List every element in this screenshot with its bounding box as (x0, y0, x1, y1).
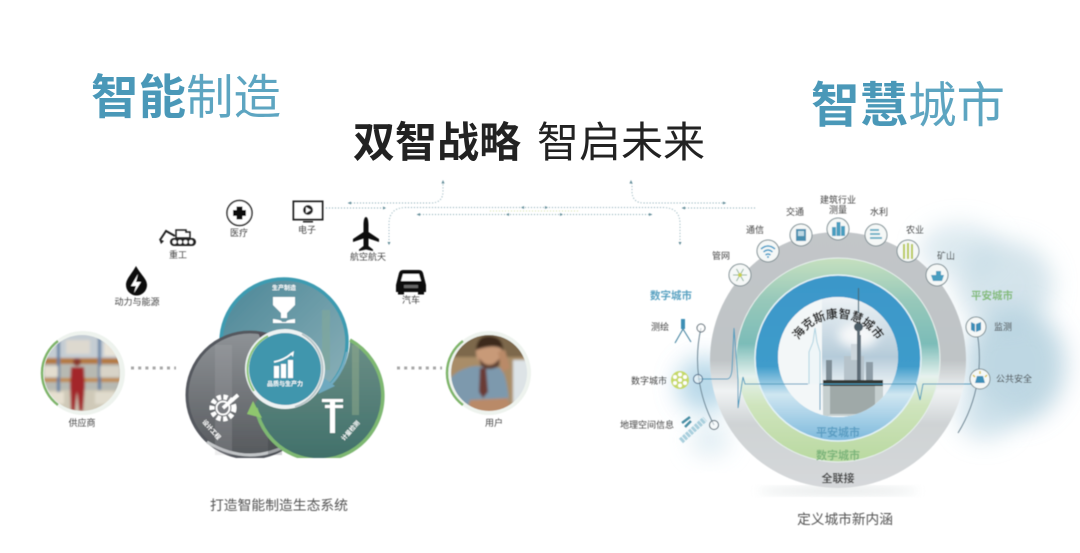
ring: digital city (736, 258, 940, 462)
user photo (447, 331, 531, 428)
ring: full connection (710, 232, 966, 488)
icon: water conservancy (865, 206, 888, 246)
item: public safety (970, 369, 1032, 389)
icon: power and energy: 动力与能源 (114, 296, 160, 307)
item: monitoring (966, 317, 1012, 337)
shadow (758, 488, 918, 494)
icon: power and energy (114, 266, 160, 307)
icon: electronics: 电子 (298, 224, 316, 235)
caption: smart city: 定义城市新内涵 (797, 511, 893, 527)
side arcs (698, 327, 979, 433)
center circle: quality and productivity (245, 329, 325, 409)
icon: agriculture: 农业 (906, 224, 924, 235)
city photo: 海克斯康智慧城市 (791, 307, 885, 340)
circle: metrology (255, 340, 383, 460)
item: surveying: 测绘 (651, 321, 669, 332)
icon: mining (926, 250, 955, 286)
item: public safety: 公共安全 (996, 373, 1032, 384)
icon: construction survey: 建筑行业 (820, 194, 856, 205)
ring: safe city (755, 275, 921, 441)
icon: pipe network (712, 250, 751, 286)
label: 用户 (485, 417, 503, 428)
diagram: smart city rings (710, 232, 966, 488)
ring: full connection: 全联接 (822, 471, 854, 485)
main heading: 双智战略 (353, 119, 521, 166)
icon: nozzle (273, 297, 295, 323)
icon: construction survey: 测量 (829, 205, 847, 215)
circle: design (184, 330, 283, 459)
circle: production: 生产制造 (272, 284, 296, 292)
circle: design: 设计工程 (200, 418, 222, 441)
dotted connector arrows (326, 180, 755, 245)
icon: water conservancy: 水利 (870, 206, 888, 217)
label: digital city: 数字城市 (650, 289, 692, 302)
icon: caliper (322, 399, 343, 433)
item: geospatial information: 地理空间信息 (620, 419, 674, 430)
icon: mining: 矿山 (937, 250, 955, 261)
icon: bar chart (274, 360, 293, 378)
icon: medical (227, 200, 252, 238)
label: 供应商 (68, 417, 96, 428)
title: 智能制造: 智能制造 (91, 72, 281, 125)
supplier photo (40, 330, 125, 428)
center circle: quality and productivity: 品质与生产力 (267, 380, 303, 388)
caption: smart manufacturing: 打造智能制造生态系统 (210, 497, 348, 513)
icon: heavy industry (159, 230, 196, 260)
label: safe city: 平安城市 (971, 289, 1013, 302)
dotted link: user (397, 366, 442, 370)
item: digital city (631, 371, 702, 389)
tower outline (809, 328, 820, 384)
clouds (677, 224, 1065, 456)
ring: safe city: 平安城市 (816, 425, 860, 439)
circle: metrology: 计量检测 (340, 419, 362, 442)
icon: gear (212, 397, 234, 419)
icon: aerospace: 航空航天 (350, 251, 386, 262)
icon: medical: 医疗 (230, 227, 248, 238)
pearl tower (858, 288, 860, 313)
circular arrows (247, 352, 347, 418)
ring title (792, 318, 884, 364)
title: 智慧城市: 智慧城市 (811, 79, 1005, 133)
icon: heavy industry: 重工 (169, 249, 187, 260)
diagram: smart manufacturing venn (187, 279, 383, 460)
main heading: 智启未来 (537, 119, 705, 166)
item: digital city: 数字城市 (631, 375, 667, 386)
icon: construction survey (820, 194, 856, 240)
icon: transportation: 交通 (786, 206, 804, 217)
item: monitoring: 监测 (994, 321, 1012, 332)
item: geospatial information (620, 417, 718, 441)
dotted link: supplier (131, 366, 176, 370)
circle: production (218, 276, 350, 383)
icon: aerospace (350, 217, 386, 262)
icon: transportation (786, 206, 812, 246)
icon: communications: 通信 (746, 224, 764, 235)
icon: pipe network: 管网 (712, 250, 730, 261)
icon: agriculture (897, 224, 924, 262)
icon: car (396, 270, 426, 305)
icon: electronics (294, 202, 322, 235)
city photo (777, 288, 899, 418)
item: surveying (651, 319, 705, 343)
icon: communications (746, 224, 779, 262)
ring: digital city: 数字城市 (816, 448, 860, 462)
icon: car: 汽车 (402, 294, 420, 305)
pulse line (698, 328, 972, 410)
